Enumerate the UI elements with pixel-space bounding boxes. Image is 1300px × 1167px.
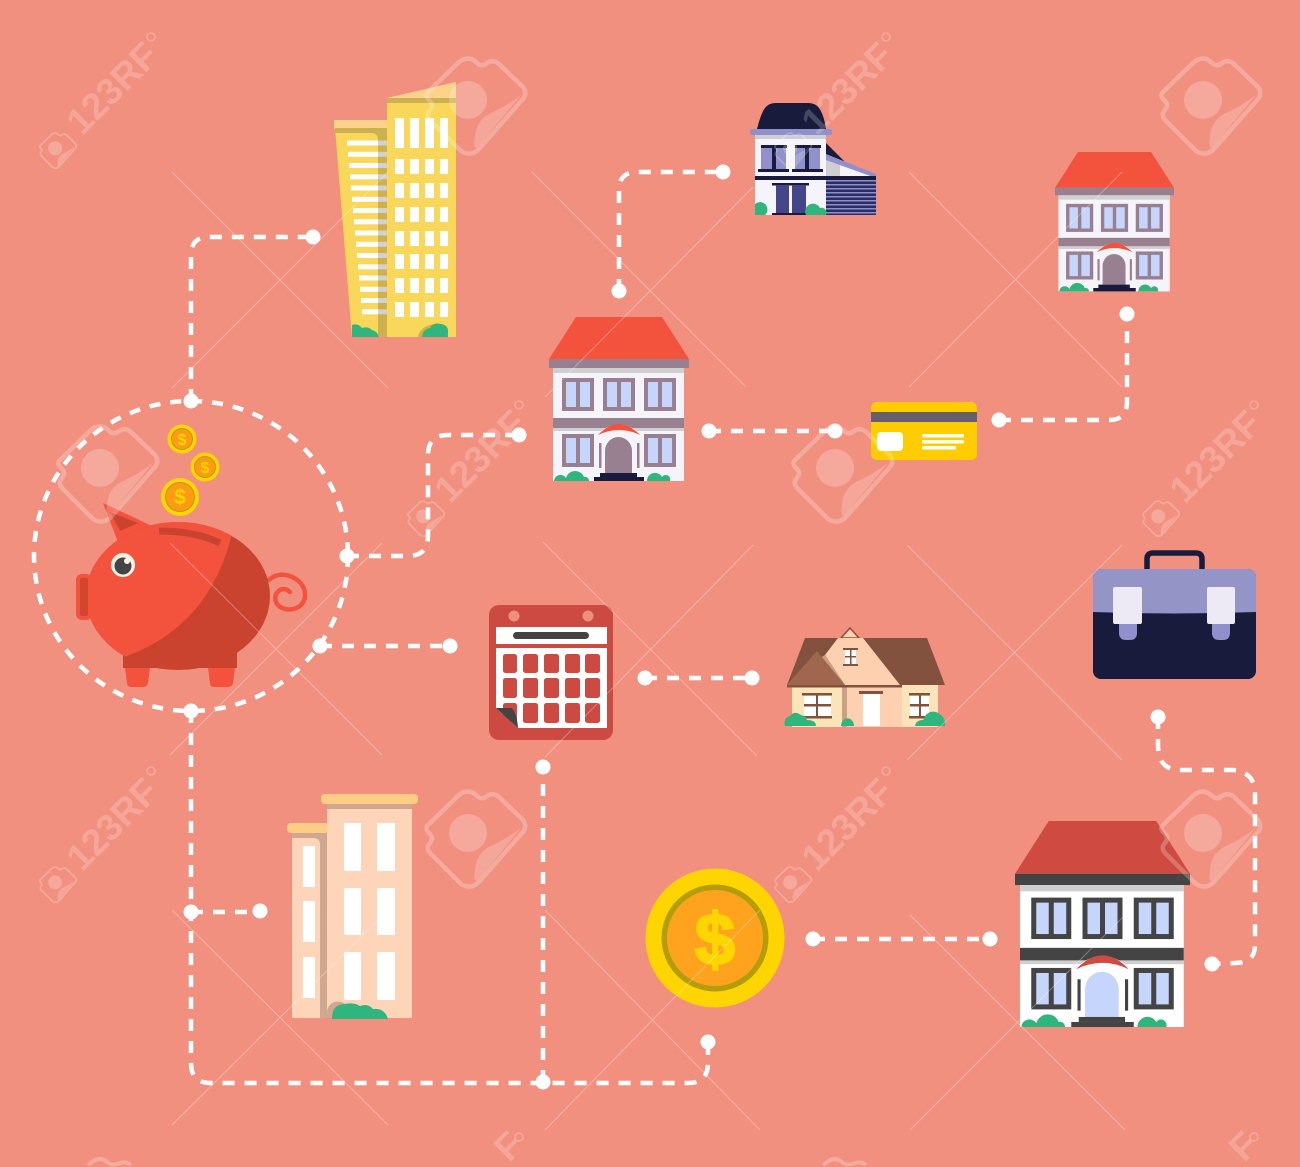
icon: navy roof house with garage (750, 103, 876, 215)
watermark stamps: 123RF (59, 35, 166, 142)
icon: large dark red roof house (1015, 821, 1190, 1027)
icon: peach building (287, 794, 418, 1019)
icon: gold dollar coin: $ (695, 900, 735, 980)
icon: red roof house, center (549, 317, 689, 481)
icon: calendar (489, 605, 613, 740)
icon: falling coins: $ (178, 432, 187, 449)
dotted connector network (184, 164, 1255, 1090)
watermark stamps: 123RF (1162, 403, 1269, 510)
watermark stamps: 123RF (427, 403, 534, 510)
icon: gold dollar coin (646, 868, 784, 1008)
icon: falling coins: $ (201, 460, 210, 477)
icon: falling coins: $ (174, 486, 186, 509)
icon: cottage (785, 628, 945, 727)
watermark stamps: 123RF (794, 771, 901, 878)
watermark stamps: 123RF (794, 35, 901, 142)
icon: red roof house, top right (1055, 152, 1174, 291)
icon: falling coins (161, 424, 220, 516)
faint crossing lines (170, 172, 1125, 1130)
icon: credit card (871, 402, 977, 460)
dashed circle around piggy bank (34, 401, 348, 711)
icon: briefcase (1093, 553, 1256, 679)
watermark stamps: 123RF (59, 771, 166, 878)
icon: yellow tower (334, 82, 456, 337)
icon: piggy bank (76, 503, 308, 687)
